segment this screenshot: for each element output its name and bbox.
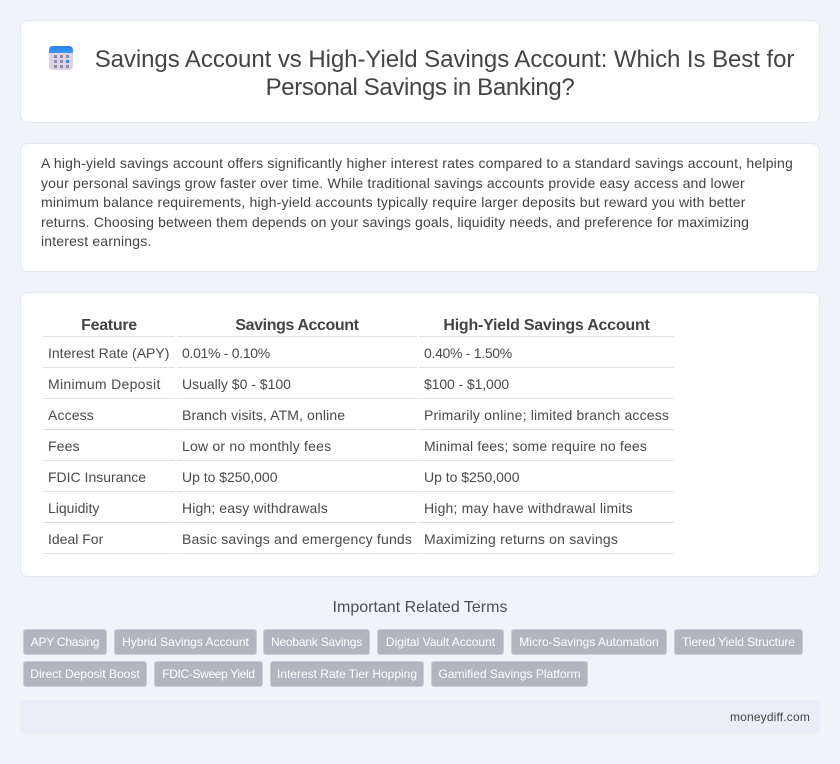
row: fees: Low or no monthly fees [182,438,331,454]
panel: title [20,20,820,123]
table content [43,317,674,554]
table header: High-Yield Savings Account [443,317,650,334]
panel: introduction [20,143,820,272]
row: fees: Fees [48,438,80,454]
title text: Savings Account vs High-Yield Savings Account: Which Is Best for [95,46,794,73]
row: fees [48,438,647,454]
row: FDIC insurance [48,469,519,485]
related term tags: Digital Vault Account [386,635,495,649]
related term tags: FDIC-Sweep Yield [162,667,255,681]
row: interest rate [48,345,512,361]
row: liquidity [48,500,633,516]
row: minimum deposit [48,376,509,392]
intro paragraph: interest earnings. [41,233,151,249]
row: FDIC insurance: Up to $250,000 [424,469,519,485]
row: interest rate: 0.01% - 0.10% [182,345,270,361]
related term tags: Hybrid Savings Account [122,635,249,649]
intro paragraph [41,155,793,249]
related term tags: Micro-Savings Automation [519,635,659,649]
row: FDIC insurance: Up to $250,000 [182,469,277,485]
row: access: Branch visits, ATM, online [182,407,345,423]
row: ideal for: Maximizing returns on savings [424,531,618,547]
row: minimum deposit: $100 - $1,000 [424,376,509,392]
intro paragraph: your personal savings grow faster over time. While traditional savings accounts provide easy access and lower [41,175,745,191]
icon: calendar [49,46,73,70]
related term tags: Direct Deposit Boost [30,667,140,681]
related term tags: APY Chasing [31,635,99,649]
row: interest rate: 0.40% - 1.50% [424,345,512,361]
row: minimum deposit: Usually $0 - $100 [182,376,291,392]
row: interest rate: Interest Rate (APY) [48,345,169,361]
table header [81,317,650,334]
related term tags [23,629,803,687]
row: access: Access [48,407,94,423]
related term tags: Interest Rate Tier Hopping [277,667,417,681]
row: ideal for: Basic savings and emergency funds [182,531,412,547]
row: access [48,407,669,423]
footer bar [20,700,820,734]
footer source: moneydiff.com [730,710,810,724]
panel: comparison table [20,292,820,577]
intro paragraph: A high-yield savings account offers significantly higher interest rates compared to a standard savings account, helping [41,155,793,171]
intro paragraph: minimum balance requirements, high-yield accounts typically require larger deposits but reward you with better [41,194,746,210]
row: ideal for [48,531,618,547]
table header: Feature [81,317,137,334]
related term tags: Neobank Savings [271,635,362,649]
heading: related terms: Important Related Terms [333,599,507,616]
related term tags: Tiered Yield Structure [682,635,795,649]
row: minimum deposit: Minimum Deposit [48,376,161,392]
row: liquidity: High; may have withdrawal limits [424,500,633,516]
row: liquidity: High; easy withdrawals [182,500,328,516]
row: FDIC insurance: FDIC Insurance [48,469,146,485]
row: access: Primarily online; limited branch access [424,407,669,423]
row: liquidity: Liquidity [48,500,99,516]
table header: Savings Account [235,317,359,334]
row: ideal for: Ideal For [48,531,103,547]
title text [95,46,794,101]
row: fees: Minimal fees; some require no fees [424,438,647,454]
title text: Personal Savings in Banking? [266,74,574,101]
intro paragraph: returns. Choosing between them depends on your savings goals, liquidity needs, and preference for maximizing [41,214,749,230]
related term tags: Gamified Savings Platform [438,667,581,681]
